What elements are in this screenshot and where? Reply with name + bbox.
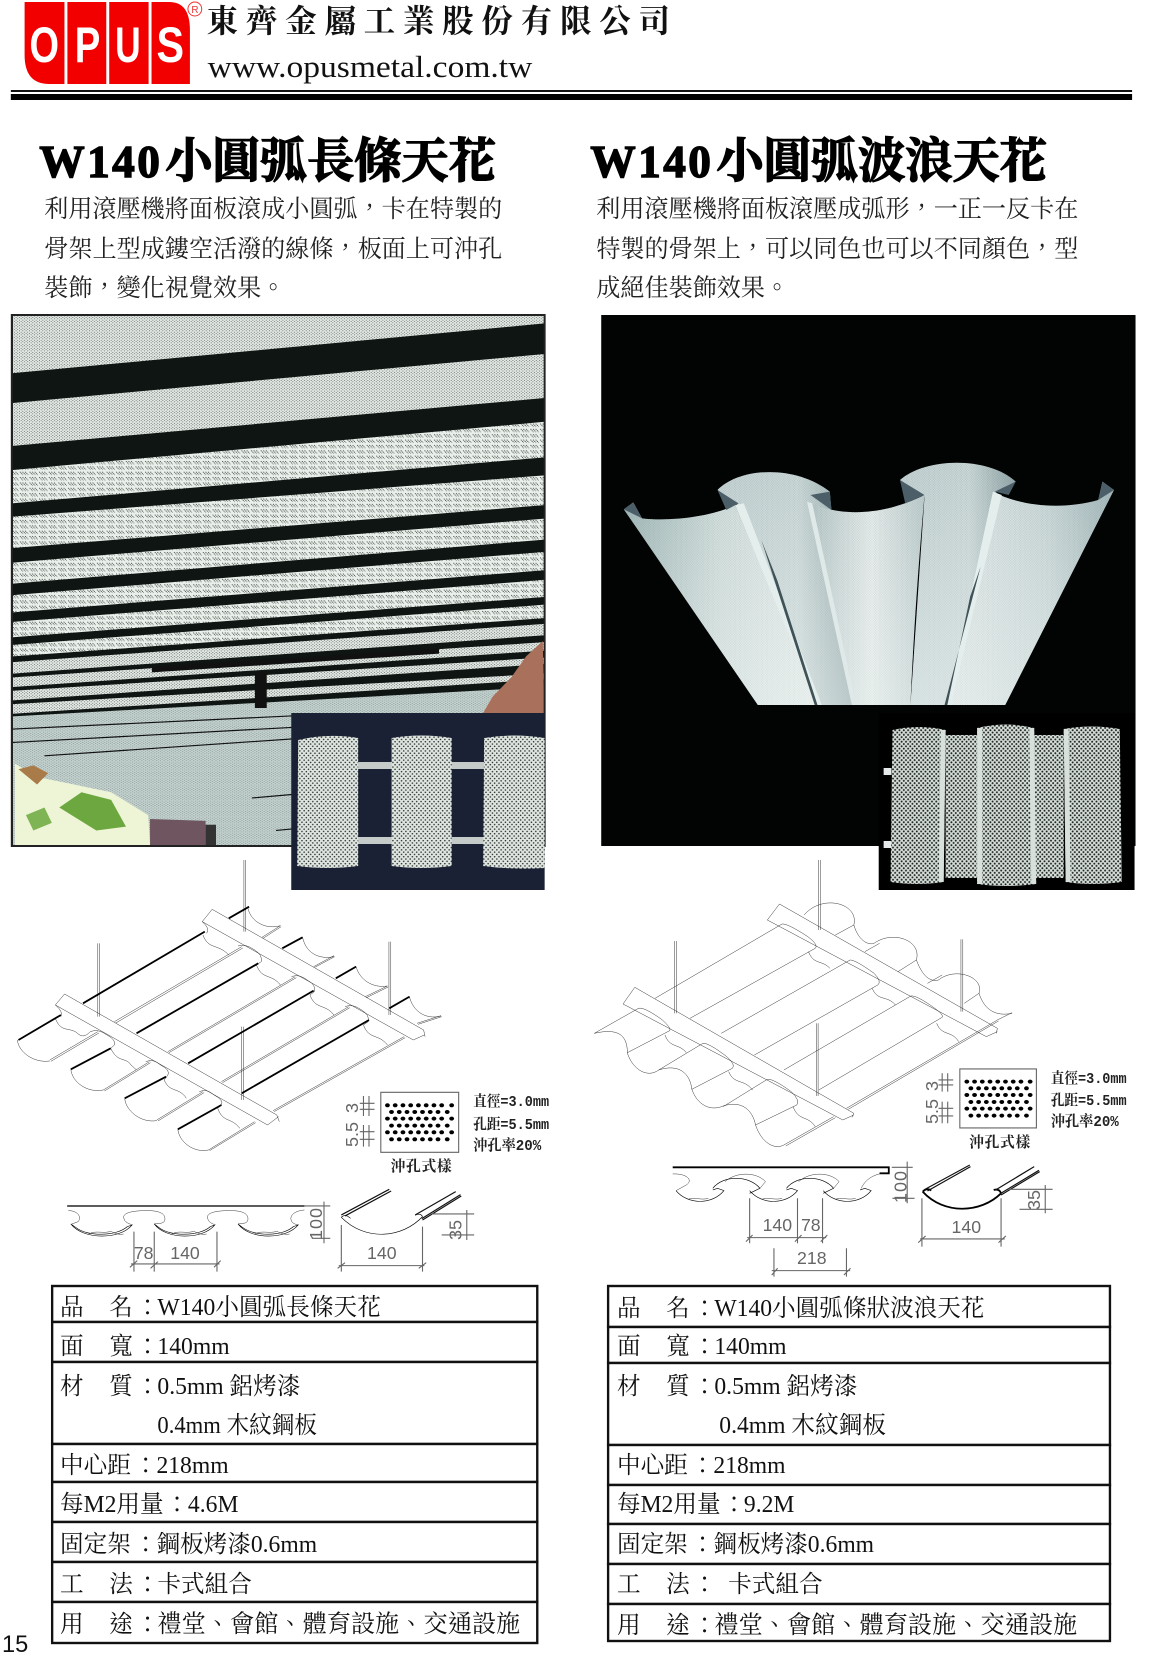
spec table: right: 140mm: [714, 1334, 787, 1360]
spec table: right: ：: [693, 1613, 716, 1639]
description: right: 特製的骨架上，可以同色也可以不同顏色，型: [596, 236, 1078, 263]
perforation pattern: left: 沖孔式樣: [391, 1157, 452, 1176]
section drawing: wave profile: 140: [952, 1217, 981, 1237]
spec table: right: 面: [617, 1334, 641, 1360]
spec table: right: 品: [617, 1296, 641, 1322]
photo: strip ceiling: [12, 315, 545, 846]
perforation pattern: left: 直徑=3.0mm: [473, 1092, 549, 1111]
title: left: W140: [39, 136, 162, 187]
spec table: right: 用: [617, 1613, 641, 1639]
spec table: left: ：: [165, 1492, 189, 1518]
spec table: right: 0.5mm 鋁烤漆: [714, 1373, 857, 1400]
section drawing: strip profile: 140: [367, 1243, 397, 1263]
section drawing: wave profile: [673, 1162, 1053, 1277]
section drawing: strip profile: 78: [134, 1243, 154, 1263]
spec table: right: 寬: [666, 1333, 690, 1360]
spec table: left: 中心距: [60, 1453, 131, 1479]
spec table: left: 0.4mm 木紋鋼板: [157, 1412, 317, 1439]
spec table: left: 法: [109, 1571, 134, 1598]
spec table: left: ：: [136, 1572, 159, 1598]
header double rule: [11, 90, 1132, 100]
description: left: 骨架上型成鏤空活潑的線條，板面上可沖孔: [44, 236, 502, 263]
spec table: right: ：: [693, 1572, 716, 1598]
spec table: right: ：: [722, 1492, 746, 1518]
logo: OPUS red badge: [25, 2, 202, 84]
spec table: right: 中心距: [617, 1453, 688, 1479]
spec table: right: 9.2M: [744, 1492, 794, 1518]
perforation pattern: right: 沖孔率20%: [1051, 1113, 1119, 1131]
spec table: right: 禮堂、會館、體育設施、交通設施: [714, 1612, 1077, 1639]
description: left: 利用滾壓機將面板滾成小圓弧，卡在特製的: [44, 196, 502, 223]
spec table: right: 質: [666, 1373, 691, 1400]
diagram: strip ceiling isometric: [17, 860, 442, 1151]
spec table: left: 質: [109, 1373, 134, 1400]
inset photo: wave panels: [879, 713, 1135, 890]
spec table: left: 面: [60, 1334, 84, 1360]
company name: 東齊金屬工業股份有限公司: [207, 4, 670, 39]
spec table: right: 固定架: [617, 1532, 688, 1558]
logo: OPUS red badge: R: [191, 5, 198, 16]
spec table: right: ：: [693, 1334, 716, 1360]
description: right: 成絕佳裝飾效果。: [596, 275, 789, 302]
spec table: left: 140mm: [157, 1334, 230, 1360]
spec table: left: ：: [136, 1374, 159, 1400]
perforation pattern: right: 孔距=5.5mm: [1051, 1092, 1127, 1110]
logo: OPUS red badge: O: [30, 17, 59, 73]
logo: OPUS red badge: S: [156, 17, 184, 73]
section drawing: strip profile: 35: [446, 1220, 465, 1240]
logo: OPUS red badge: P: [75, 17, 100, 73]
section drawing: wave profile: 140: [763, 1215, 792, 1235]
section drawing: wave profile: 78: [801, 1215, 821, 1235]
spec table: left: 用: [60, 1612, 84, 1638]
perforation pattern: right: 3: [922, 1081, 942, 1091]
spec table: left: 卡式組合: [157, 1571, 252, 1598]
spec table: right: 名: [666, 1295, 690, 1322]
section drawing: wave profile: 35: [1024, 1190, 1044, 1210]
spec table: left: 固定架: [60, 1532, 131, 1558]
spec table: right: 工: [617, 1572, 641, 1598]
spec table: right: ：: [693, 1374, 716, 1400]
perforation pattern: left: 孔距=5.5mm: [473, 1116, 549, 1134]
title: right: W140: [590, 136, 713, 187]
spec table: right: 卡式組合: [728, 1571, 823, 1598]
spec table: left: 每M2用量: [60, 1492, 164, 1518]
title: left: 小圓弧長條天花: [165, 135, 496, 188]
spec table: right: W140小圓弧條狀波浪天花: [714, 1295, 985, 1322]
spec table: left: 4.6M: [188, 1492, 238, 1518]
spec table: left: 0.5mm 鋁烤漆: [157, 1373, 300, 1400]
perforation pattern: right: [922, 1069, 1127, 1152]
logo: OPUS red badge: U: [115, 17, 141, 73]
spec table: right: [608, 1286, 1110, 1641]
section drawing: wave profile: 100: [890, 1171, 910, 1203]
spec table: right: 途: [666, 1612, 691, 1639]
title: right: 小圓弧波浪天花: [716, 135, 1047, 188]
perforation pattern: right: 沖孔式樣: [969, 1133, 1030, 1152]
section drawing: wave profile: 218: [797, 1248, 827, 1268]
spec table: left: W140小圓弧長條天花: [157, 1294, 381, 1321]
perforation pattern: left: 3: [342, 1103, 362, 1113]
description: left: 裝飾，變化視覺效果。: [44, 275, 285, 302]
section drawing: strip profile: 100: [306, 1208, 326, 1240]
section drawing: strip profile: [67, 1189, 474, 1272]
perforation pattern: right: 5.5: [922, 1099, 942, 1124]
perforation pattern: left: [342, 1092, 549, 1176]
spec table: right: 每M2用量: [617, 1492, 721, 1518]
spec table: right: ：: [693, 1296, 716, 1322]
website url: www.opusmetal.com.tw: [208, 50, 533, 84]
spec table: right: 鋼板烤漆0.6mm: [713, 1531, 875, 1558]
description: right: [596, 196, 1078, 302]
description: left: [44, 196, 502, 302]
spec table: left: 品: [60, 1295, 84, 1321]
spec table: left: ：: [136, 1612, 159, 1638]
spec table: left: 材: [60, 1374, 84, 1400]
spec table: left: 工: [60, 1572, 84, 1598]
perforation pattern: right: 直徑=3.0mm: [1051, 1069, 1127, 1088]
spec table: left: 218mm: [156, 1453, 229, 1479]
perforation pattern: left: 5.5: [342, 1122, 362, 1147]
perforation pattern: left: 沖孔率20%: [473, 1137, 541, 1155]
section drawing: strip profile: 140: [170, 1243, 200, 1263]
spec table: right: 法: [666, 1571, 691, 1598]
spec table: right: 材: [617, 1374, 641, 1400]
spec table: left: 鋼板烤漆0.6mm: [156, 1531, 318, 1558]
description: right: 利用滾壓機將面板滾壓成弧形，一正一反卡在: [596, 196, 1078, 223]
spec table: left: ：: [136, 1334, 159, 1360]
spec table: right: 0.4mm 木紋鋼板: [719, 1412, 886, 1439]
photo: wave ceiling: [601, 315, 1136, 846]
spec table: left: 禮堂、會館、體育設施、交通設施: [157, 1611, 520, 1638]
spec table: right: ：: [691, 1532, 714, 1558]
spec table: left: [52, 1286, 537, 1643]
spec table: left: ：: [134, 1532, 157, 1558]
spec table: left: 途: [109, 1611, 134, 1638]
spec table: left: ：: [134, 1453, 157, 1479]
spec table: left: 寬: [109, 1333, 133, 1360]
diagram: wave ceiling isometric: [594, 860, 1012, 1147]
page number: 15: [2, 1631, 28, 1658]
spec table: left: 名: [109, 1294, 133, 1321]
spec table: right: 218mm: [713, 1453, 786, 1479]
spec table: right: ：: [691, 1453, 714, 1479]
inset photo: strip panels: [291, 713, 545, 890]
spec table: left: ：: [136, 1295, 159, 1321]
